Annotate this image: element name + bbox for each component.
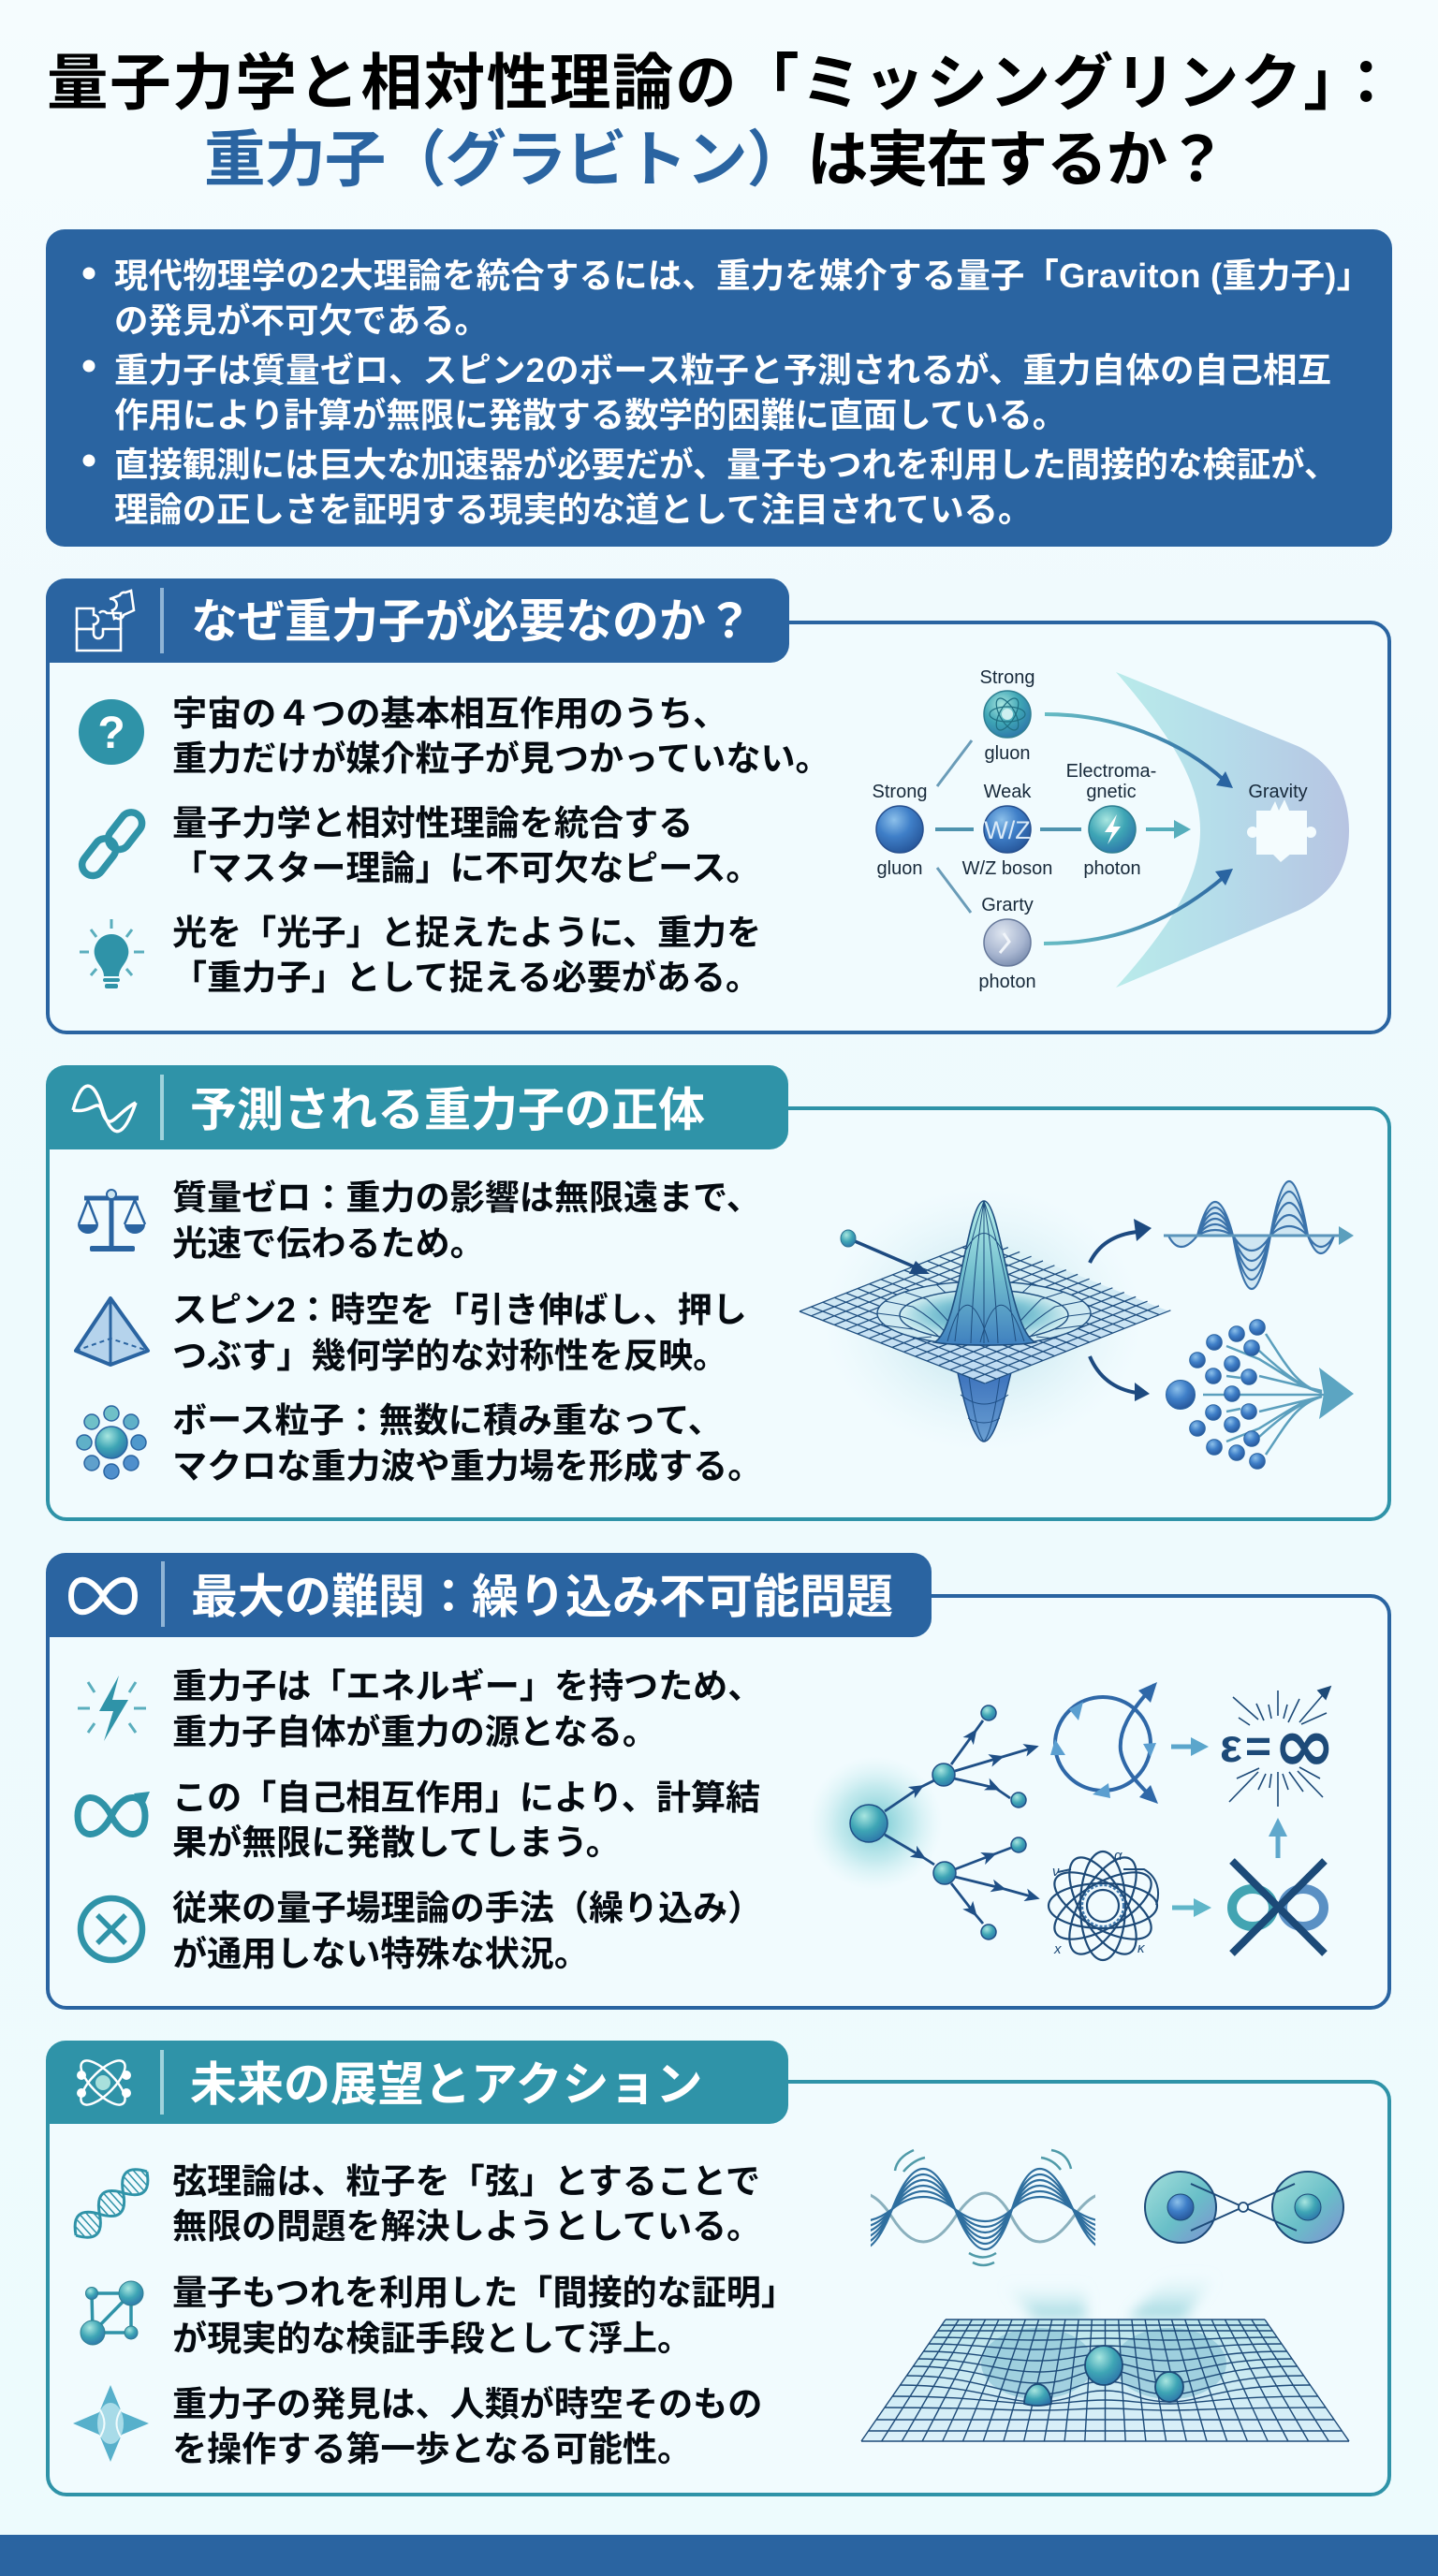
chart: future (831, 2150, 1349, 2441)
heading: future outlook: 未来の展望とアクション (190, 2058, 702, 2111)
text: item 1: 重力だけが媒介粒子が見つかっていない。 (172, 739, 830, 778)
labels: Gravity (1248, 782, 1308, 802)
text: item 2 (172, 1290, 747, 1375)
node: strong top (984, 691, 1031, 738)
epsilon equals infinity: = (1245, 1722, 1271, 1772)
grid sheet (800, 1238, 1170, 1383)
text: item 3: 重力子の発見は、人類が時空そのもの (172, 2384, 762, 2423)
title: は実在するか？ (807, 125, 1227, 194)
chart: four forces (873, 667, 1349, 992)
text: item 1: 光速で伝わるため。 (172, 1223, 485, 1263)
epsilon equals infinity (1220, 1702, 1336, 1789)
text: item 3: 「重力子」として捉える必要がある。 (172, 958, 760, 997)
text: item 2 (172, 803, 760, 887)
labels: photon (1083, 858, 1141, 879)
entangled cells (1145, 2172, 1343, 2243)
arrow: orbits to crossed infinity (1172, 1898, 1211, 1917)
labels (873, 667, 1308, 992)
labels: Weak (984, 782, 1032, 802)
lower lobe (957, 1368, 1012, 1442)
arrow: loop to infinity (1171, 1737, 1209, 1756)
tree nodes (850, 1705, 1026, 1939)
self-interaction loop (1050, 1682, 1158, 1804)
text: item 1: 宇宙の４つの基本相互作用のうち、 (172, 694, 727, 733)
icon: scales (78, 1190, 145, 1251)
arrow: bottom (1044, 869, 1233, 944)
title (47, 49, 1397, 194)
orbit symbols: x (1053, 1941, 1062, 1957)
icon: infinity arrow (78, 1792, 150, 1835)
icon: bosons (77, 1406, 146, 1479)
labels: gnetic (1086, 782, 1137, 802)
heading: future outlook (46, 2041, 788, 2124)
heading: biggest challenge: 最大の難関：繰り込み不可能問題 (191, 1571, 893, 1623)
text: item 2: スピン2：時空を「引き伸ばし、押し (172, 1290, 747, 1329)
labels: gluon (877, 858, 922, 879)
heading: why graviton: なぜ重力子が必要なのか？ (191, 595, 753, 648)
text: item 2 (172, 2273, 796, 2358)
labels: photon (978, 972, 1036, 992)
labels: Electroma- (1066, 761, 1156, 782)
string waves (871, 2168, 1095, 2250)
icon: puzzle (77, 591, 134, 651)
panel: biggest challenge (46, 1553, 1389, 2008)
text: item 3: 光を「光子」と捉えたように、重力を (172, 913, 761, 952)
heading: biggest challenge (46, 1553, 932, 1637)
epsilon equals infinity: ∞ (1273, 1702, 1336, 1789)
icon: dna (67, 2161, 155, 2246)
item: question (79, 699, 144, 765)
text: item 1 (172, 694, 830, 778)
text: item 2: 「マスター理論」に不可欠なピース。 (172, 848, 760, 887)
vibration marks (895, 2150, 1071, 2265)
panel: summary: 現代物理学の2大理論を統合するには、重力を媒介する量子「Graviton (重力子)」 (114, 256, 1371, 295)
text: item 2: が現実的な検証手段として浮上。 (172, 2319, 692, 2358)
labels: gluon (985, 743, 1030, 764)
gravity funnel (1116, 672, 1349, 988)
panel: summary (46, 229, 1392, 547)
labels: W/Z boson (962, 858, 1052, 879)
panel: why graviton (46, 578, 1389, 1032)
icon: link (78, 808, 146, 880)
text: item 3 (172, 1400, 762, 1486)
labels: Strong (980, 667, 1034, 688)
heading: why graviton (46, 578, 789, 663)
icon: bolt (78, 1676, 146, 1741)
title: 重力子（グラビトン） (204, 125, 808, 194)
puzzle piece (1247, 799, 1316, 862)
icon: network (81, 2281, 143, 2345)
icon: atom (75, 2055, 131, 2111)
warped grid (861, 2320, 1349, 2441)
orbit symbols: ν (1052, 1864, 1060, 1880)
rays (1229, 1687, 1330, 1807)
orbit symbols: α (1114, 1848, 1123, 1864)
arrow: top (1045, 714, 1233, 788)
node: grey (984, 919, 1031, 966)
orbit symbols: κ (1137, 1940, 1146, 1956)
epsilon equals infinity: ε (1220, 1720, 1242, 1772)
incoming ball (841, 1230, 930, 1274)
icon: wave (73, 1086, 136, 1132)
text: item 2: この「自己相互作用」により、計算結 (172, 1778, 760, 1817)
panel: summary: の発見が不可欠である。 (114, 301, 489, 340)
light beams (1003, 2275, 1217, 2319)
arrow: upper (1090, 1219, 1152, 1263)
text: item 2: 量子力学と相対性理論を統合する (172, 803, 693, 842)
icon: cross circle (81, 1898, 142, 1960)
panel: future outlook (46, 2041, 1389, 2495)
text: item 2: 果が無限に発散してしまう。 (172, 1822, 621, 1862)
central peak (934, 1201, 1035, 1345)
tangled orbits (1045, 1848, 1161, 1964)
labels: Strong (873, 782, 927, 802)
labels: Grarty (981, 895, 1034, 915)
gravitational wave (1164, 1181, 1354, 1289)
text: item 1: 無限の問題を解決しようとしている。 (172, 2206, 761, 2246)
panel: summary: 作用により計算が無限に発散する数学的困難に直面している。 (114, 396, 1066, 434)
icon: star (73, 2385, 149, 2462)
title: 量子力学と相対性理論の「ミッシングリンク」： (47, 49, 1397, 117)
orbit symbols (1052, 1848, 1146, 1957)
item: question: ? (97, 709, 125, 758)
node: W/Z: W/Z (984, 816, 1031, 844)
crater (877, 1281, 1091, 1345)
node: gluon left (876, 806, 923, 853)
text: item 1: 重力子自体が重力の源となる。 (172, 1712, 657, 1751)
chart: divergence (808, 1682, 1336, 1964)
text: item 2: つぶす」幾何学的な対称性を反映。 (172, 1336, 727, 1375)
chart: spacetime bump (800, 1181, 1354, 1469)
arrow: lower (1090, 1356, 1150, 1401)
icon: infinity (71, 1580, 135, 1612)
node: photon (1089, 806, 1136, 853)
connectors (937, 740, 972, 913)
text: item 1 (172, 2161, 761, 2246)
panel: summary: 直接観測には巨大な加速器が必要だが、量子もつれを利用した間接的な検証が、 (114, 446, 1338, 484)
text: item 3: マクロな重力波や重力場を形成する。 (172, 1446, 762, 1486)
text: item 3 (172, 1888, 762, 1973)
heading: predicted identity: 予測される重力子の正体 (190, 1084, 705, 1136)
tree edges (885, 1720, 1034, 1924)
panel: summary: 重力子は質量ゼロ、スピン2のボース粒子と予測されるが、重力自体の自己相互 (114, 351, 1331, 389)
masses (1024, 2346, 1183, 2406)
heading: predicted identity (46, 1065, 788, 1149)
text: item 3: ボース粒子：無数に積み重なって、 (172, 1400, 723, 1440)
text: item 3: を操作する第一歩となる可能性。 (172, 2429, 692, 2468)
text: item 3: 従来の量子場理論の手法（繰り込み） (172, 1888, 762, 1927)
arrow: teal to gravity (1146, 820, 1191, 839)
text: item 1: 弦理論は、粒子を「弦」とすることで (172, 2161, 760, 2201)
text: item 2: 量子もつれを利用した「間接的な証明」 (172, 2273, 796, 2312)
panel: predicted identity (46, 1065, 1389, 1519)
footer bar (0, 2535, 1438, 2576)
text: item 3 (172, 2384, 762, 2468)
text: item 1 (172, 1178, 761, 1263)
arrow: up (1269, 1818, 1287, 1858)
particle stream (1167, 1320, 1354, 1469)
text: item 1: 重力子は「エネルギー」を持つため、 (172, 1666, 762, 1705)
text: item 2 (172, 1778, 760, 1862)
icon: light bulb (80, 919, 144, 988)
text: item 3 (172, 913, 761, 997)
text: item 3: が通用しない特殊な状況。 (172, 1934, 589, 1973)
text: item 1 (172, 1666, 762, 1751)
icon: pyramid (76, 1298, 148, 1365)
node: W/Z (984, 806, 1031, 853)
text: item 1: 質量ゼロ：重力の影響は無限遠まで、 (172, 1178, 761, 1217)
crossed infinity (1232, 1861, 1325, 1954)
panel: summary: 理論の正しさを証明する現実的な道として注目されている。 (114, 490, 1032, 529)
